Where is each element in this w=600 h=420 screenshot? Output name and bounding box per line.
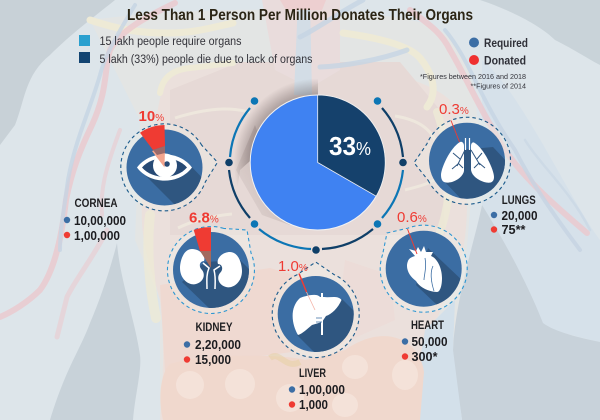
donated wedge (194, 227, 211, 268)
figures: cornea: CORNEA (74, 198, 118, 210)
icon: kidneys (180, 249, 242, 289)
figures: heart (402, 320, 448, 364)
ring around pie chart (225, 97, 407, 254)
figures: lungs: 75** (502, 223, 526, 237)
percentage: 10%: 10% (138, 108, 164, 125)
legend: statistics (79, 35, 313, 66)
percentage: 6.8%: 6.8% (189, 210, 219, 226)
footnotes: *Figures between 2016 and 2018 (420, 72, 526, 81)
percentage: 0.6%: 0.6% (397, 209, 427, 226)
figures: cornea: 1,00,000 (74, 229, 120, 243)
figures: lungs (491, 195, 538, 237)
figures: cornea (64, 198, 126, 243)
donated wedge (140, 125, 165, 168)
donated marker line (299, 274, 315, 310)
percentage: 1.0%: 1.0% (278, 258, 308, 275)
figures: cornea: 10,00,000 (74, 214, 126, 228)
panel: lungs (414, 101, 538, 237)
icon: heart (407, 246, 442, 292)
figures: liver: LIVER (299, 368, 327, 380)
legend: required and donated: Required (484, 38, 528, 50)
panel: heart (380, 209, 467, 364)
figures: kidney: 15,000 (195, 353, 231, 367)
legend: required and donated (469, 38, 528, 68)
panel: cornea (64, 108, 217, 243)
figures: kidney: KIDNEY (196, 322, 233, 334)
figures: kidney: 2,20,000 (195, 338, 241, 352)
legend: required and donated: Donated (484, 56, 526, 68)
figures: heart: HEART (411, 320, 444, 332)
legend: statistics: 15 lakh people require organs (100, 36, 242, 48)
pie chart: 33 percent: 33% (329, 131, 371, 161)
panel: liver (272, 258, 360, 412)
footnotes: **Figures of 2014 (470, 82, 526, 90)
legend: statistics: 5 lakh (33%) people die due to lack of organs (100, 54, 313, 66)
figures: liver: 1,000 (299, 398, 328, 412)
donated marker line (408, 229, 417, 254)
figures: heart: 300* (412, 350, 438, 364)
icon: eye (137, 154, 192, 181)
figures: liver: 1,00,000 (299, 383, 345, 397)
panel: kidney (167, 210, 255, 367)
figures: lungs: LUNGS (502, 195, 536, 207)
percentage: 0.3%: 0.3% (439, 101, 469, 118)
figures: heart: 50,000 (412, 335, 448, 349)
figures: lungs: 20,000 (502, 209, 538, 223)
donated marker line (451, 120, 460, 142)
figures: kidney (184, 322, 241, 367)
icon: lungs (441, 138, 494, 183)
pie chart: 33 percent (236, 80, 386, 230)
figures: liver (289, 368, 345, 412)
footnotes (420, 72, 526, 90)
icon: liver (293, 293, 342, 335)
title: Less Than 1 Person Per Million Donates Their Organs (127, 7, 473, 24)
